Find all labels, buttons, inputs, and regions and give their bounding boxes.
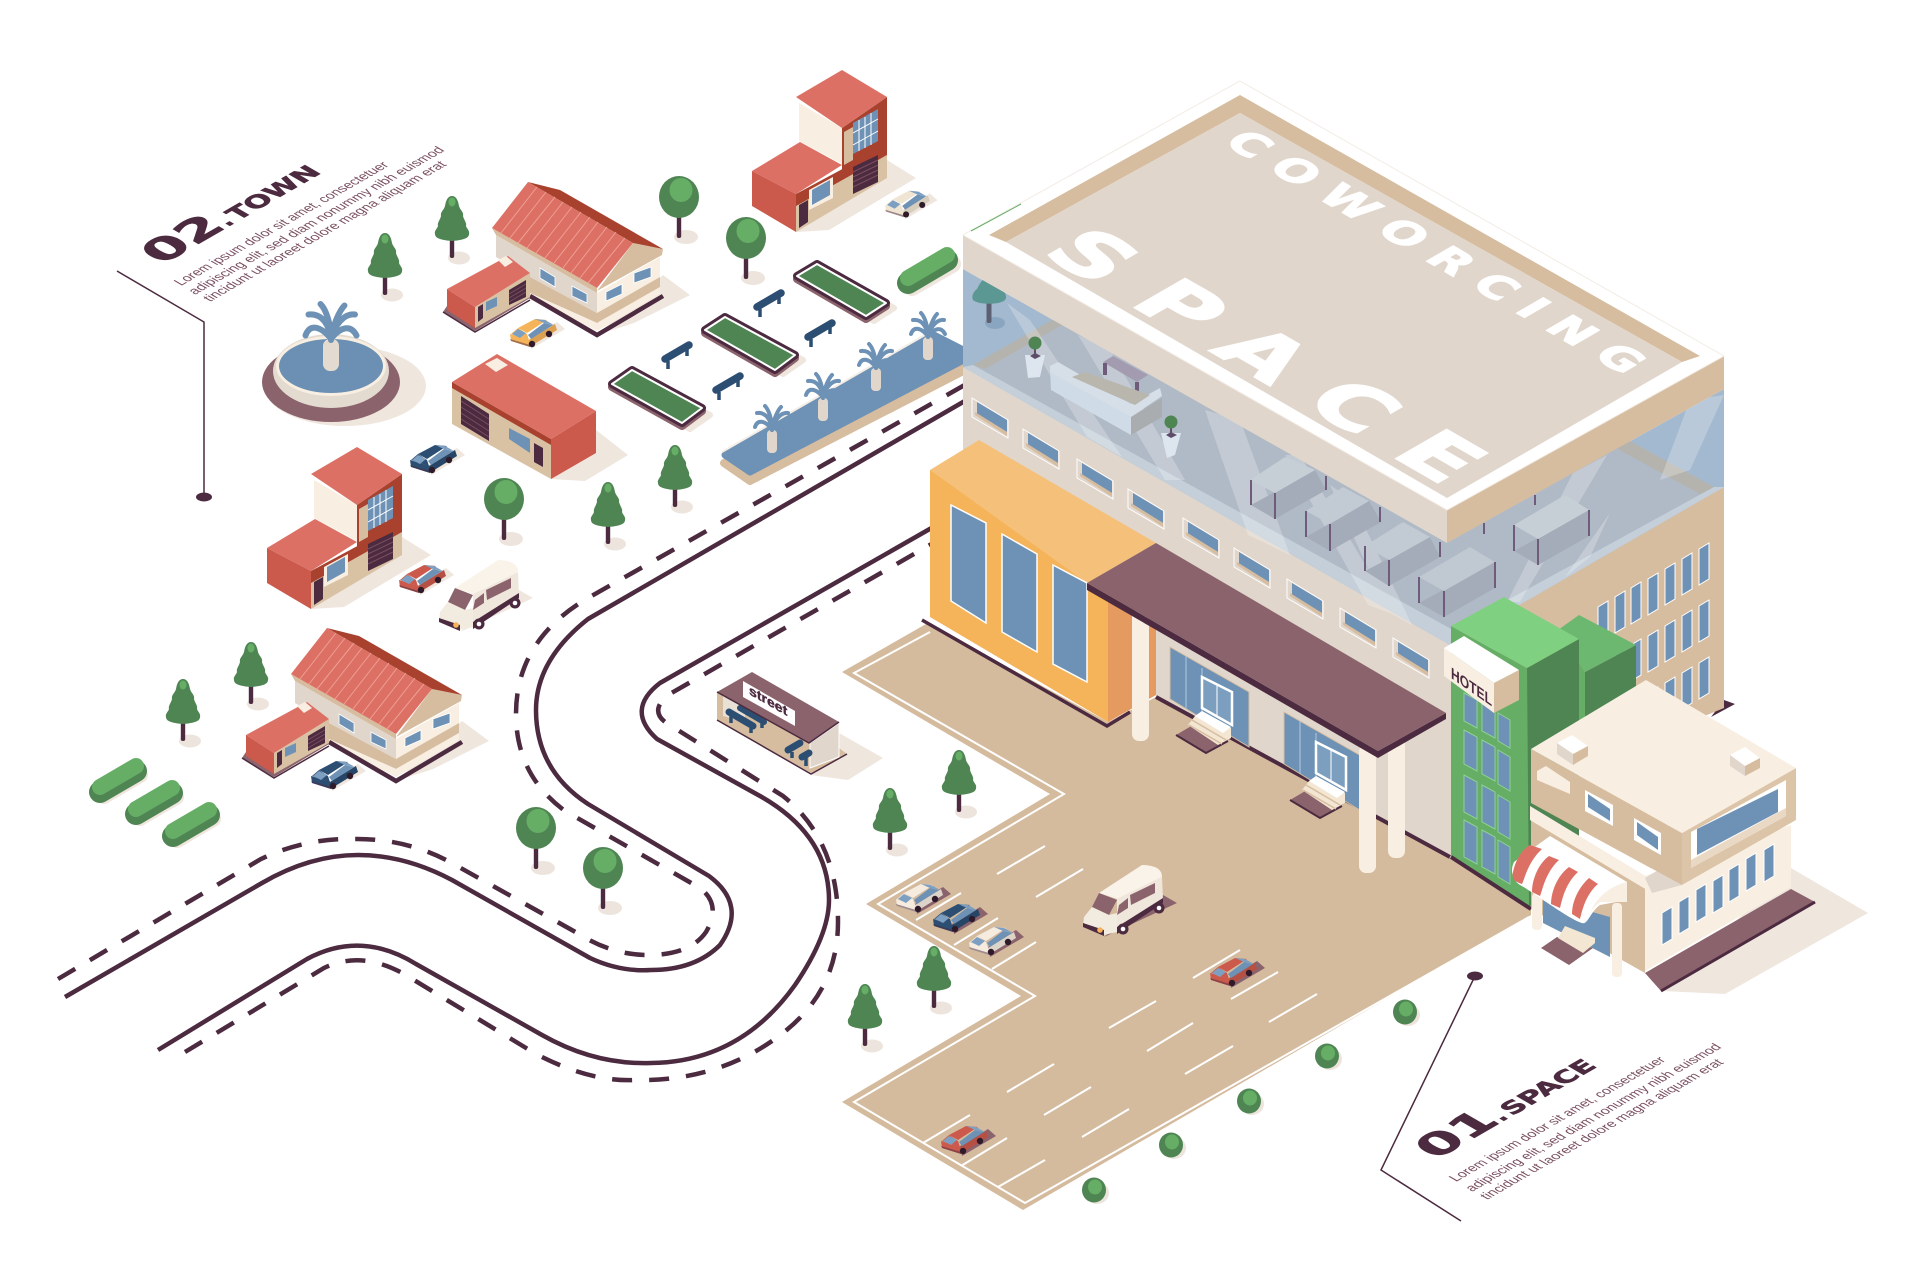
- pine tree: [368, 233, 403, 302]
- potted plant: [1161, 416, 1181, 458]
- pine tree: [591, 482, 626, 550]
- roads: [58, 382, 970, 1080]
- planter three: [797, 264, 894, 321]
- heading: 02.town: [128, 153, 331, 270]
- pine tree: [942, 750, 977, 818]
- entrance mat: [1541, 937, 1593, 965]
- body text: adipiscing elit, sed diam nonummy nibh euismod: [184, 144, 448, 297]
- body text: tincidunt ut laoreet dolore magna aliquam erat: [199, 158, 450, 304]
- annex building: [1512, 680, 1868, 994]
- body text: Lorem ipsum dolor sit amet, consectetuer: [170, 159, 393, 288]
- car: cream: [885, 191, 937, 219]
- pine tree: [848, 984, 883, 1052]
- entrance wall: [1156, 543, 1460, 860]
- reception desk: [1050, 362, 1162, 435]
- heading: 01.space: [1402, 1047, 1607, 1165]
- round tree: [726, 217, 766, 285]
- body text: Lorem ipsum dolor sit amet, consectetuer: [1445, 1054, 1669, 1184]
- house: flat garage: [452, 354, 628, 481]
- benches: [729, 708, 809, 766]
- glass floor: [963, 269, 1724, 645]
- parked car navy: [933, 904, 988, 934]
- hedge top: [908, 255, 952, 287]
- pillars: [1132, 610, 1405, 873]
- bush: [1393, 1000, 1420, 1026]
- panel: main coworking building: [922, 81, 1868, 994]
- bush: [1315, 1044, 1342, 1070]
- roof slab: [963, 81, 1724, 543]
- bench: [808, 323, 832, 347]
- heading: 01.space: SPACE: [1493, 1055, 1603, 1119]
- canopy: [1087, 543, 1446, 758]
- car: red: [399, 565, 454, 595]
- entrance two: [1284, 712, 1363, 818]
- entrance doors: [1543, 898, 1610, 957]
- heading: 02.town: .: [209, 211, 241, 230]
- hotel sign text: HOTEL: [1451, 665, 1492, 711]
- hedge one: [100, 766, 140, 796]
- fountain: [262, 304, 426, 426]
- parked car cream: [896, 884, 951, 914]
- planter one: [612, 370, 710, 429]
- house: two-storey one: [752, 70, 916, 232]
- hotel sign: [1444, 636, 1519, 713]
- parked car red: [1210, 958, 1265, 988]
- roof vent: [1730, 747, 1760, 776]
- beige floor wall: [963, 367, 1453, 860]
- panel: town: [100, 70, 973, 915]
- upper wall windows: [972, 398, 1429, 678]
- pine tree: [234, 642, 269, 710]
- roof text: space: SPACE: [1023, 216, 1507, 496]
- roof vent: [1557, 735, 1588, 765]
- parked car red: [941, 1126, 996, 1156]
- glass tree: [972, 276, 1006, 329]
- house: cottage one: [443, 182, 690, 335]
- pine tree: [166, 679, 201, 748]
- bus stop shelter: [717, 672, 883, 780]
- bush: [1159, 1132, 1186, 1159]
- round tree: [484, 478, 524, 546]
- house: cottage two: [242, 628, 489, 781]
- hedge three: [173, 810, 213, 840]
- light beams: [1007, 303, 1724, 625]
- roof text: coworcing: COWORCING: [1213, 124, 1657, 380]
- plaza parking lot: [842, 620, 1531, 1210]
- hotel tower: [1451, 597, 1579, 909]
- bench: [757, 293, 781, 317]
- second green hotel block: [1558, 615, 1636, 770]
- tan side wall: [1500, 487, 1735, 800]
- bush: [1237, 1088, 1264, 1115]
- planter two: [705, 317, 803, 374]
- pine tree: [873, 788, 908, 856]
- pine tree: [435, 196, 470, 264]
- heading: 02.town: TOWN: [219, 161, 327, 224]
- entrance one: [1170, 647, 1249, 753]
- pool with palms: [722, 313, 973, 481]
- van: town: [439, 560, 533, 632]
- house: two-storey two: [267, 447, 431, 609]
- tables: [1250, 457, 1589, 617]
- heading: 01.space: .: [1483, 1106, 1515, 1125]
- van: plaza: [1083, 865, 1177, 937]
- heading: 02.town: 02: [128, 207, 236, 270]
- round tree: [659, 176, 699, 244]
- bush: [1082, 1178, 1109, 1204]
- bench: [665, 345, 689, 369]
- stairs: [1558, 926, 1595, 953]
- chair: [1103, 356, 1148, 392]
- awning: [1512, 836, 1627, 923]
- pine tree: [917, 946, 952, 1014]
- parked car cream: [969, 927, 1024, 957]
- pine tree: [658, 445, 693, 514]
- body text: tincidunt ut laoreet dolore magna aliquam erat: [1476, 1056, 1727, 1202]
- bench: [716, 376, 740, 400]
- callout: 01 space: [1381, 972, 1727, 1221]
- heading: 01.space: 01: [1402, 1102, 1510, 1165]
- round tree: [583, 847, 623, 915]
- awning pillars: [1532, 893, 1622, 977]
- body text: adipiscing elit, sed diam nonummy nibh euismod: [1461, 1041, 1725, 1194]
- car: navy: [410, 445, 465, 475]
- potted plant: [1025, 336, 1045, 378]
- car: navy near cottage: [311, 761, 366, 791]
- orange block: [922, 440, 1156, 726]
- round tree: [516, 807, 556, 875]
- callout: 02 town: [117, 144, 450, 502]
- sign text: street: street: [749, 682, 788, 719]
- car: yellow: [510, 319, 565, 349]
- hedge two: [136, 788, 176, 818]
